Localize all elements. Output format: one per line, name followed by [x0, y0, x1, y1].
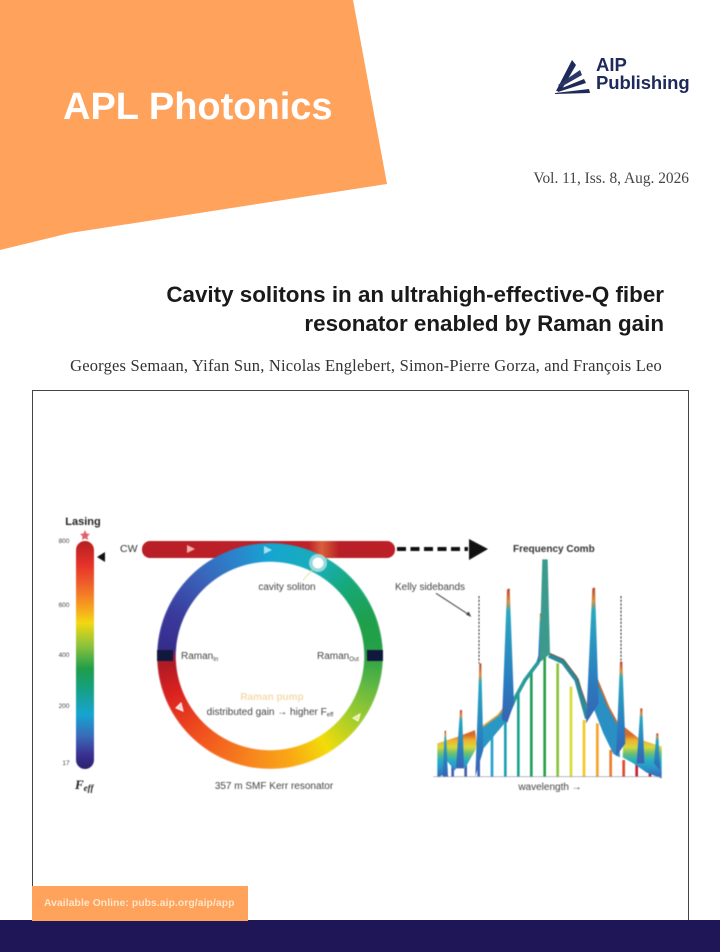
scale labels: 400 [59, 652, 70, 659]
footer band [0, 920, 720, 952]
F eff label: F [75, 777, 84, 792]
scale labels [59, 538, 70, 767]
ring glow [157, 543, 383, 769]
resonator label: 357 m SMF Kerr resonator [215, 781, 334, 792]
wavelength label: wavelength → [517, 782, 582, 793]
frequency comb title: Frequency Comb [513, 544, 595, 555]
Raman out label: Raman [317, 651, 349, 662]
right wing [623, 727, 662, 778]
article title: Cavity solitons in an ultrahigh-effective-Q fiber [166, 282, 664, 307]
lasing label: Lasing [65, 516, 101, 528]
distributed gain label: eff [327, 712, 334, 718]
CW label: CW [120, 543, 138, 555]
volume line: Vol. 11, Iss. 8, Aug. 2026 [533, 170, 689, 187]
comb lines [439, 653, 650, 777]
logo: AIP Publishing [555, 54, 690, 94]
left wing [437, 730, 477, 777]
availability tag: Available Online: pubs.aip.org/aip/app [44, 898, 235, 909]
scale labels: 800 [59, 538, 70, 545]
baseline [433, 776, 662, 778]
orange header shape [0, 0, 387, 250]
logo: AIP Publishing: Publishing [596, 72, 690, 93]
scale labels: 600 [59, 602, 70, 609]
Raman out label: Out [349, 657, 359, 663]
cavity soliton label: cavity soliton [258, 582, 316, 593]
color scale bar [76, 541, 94, 769]
dashed arrow [397, 539, 488, 560]
Kelly sidebands label: Kelly sidebands [395, 582, 465, 593]
centre band [506, 647, 543, 718]
Raman in label: In [213, 657, 218, 663]
central peak [539, 559, 550, 663]
distributed gain label: distributed gain → higher F [207, 707, 327, 718]
comb spectrum [433, 559, 662, 778]
inner left band [480, 698, 513, 753]
icon: scale pointer [97, 552, 105, 562]
ring resonator [157, 543, 383, 769]
arrows on bar and ring [176, 545, 360, 721]
journal title: APL Photonics [63, 86, 333, 128]
scale labels: 200 [59, 703, 70, 710]
spikes [443, 587, 660, 777]
figure [58, 516, 662, 794]
article title [166, 282, 664, 336]
figure frame [32, 390, 689, 927]
Raman in label: Raman [181, 651, 213, 662]
availability tag [32, 886, 248, 921]
inner right band [592, 677, 620, 757]
logo: AIP Publishing: AIP [596, 54, 627, 75]
Raman pump label: Raman pump [240, 692, 304, 703]
article title: resonator enabled by Raman gain [304, 311, 664, 336]
F eff label: eff [84, 783, 95, 793]
scale labels: 17 [62, 760, 70, 767]
authors: Georges Semaan, Yifan Sun, Nicolas Englebert, Simon-Pierre Gorza, and François Leo [70, 356, 662, 375]
waveguide bar [142, 541, 395, 558]
sideband pointer [436, 593, 471, 617]
raman couplers [157, 650, 383, 661]
icon: star [80, 530, 90, 540]
soliton marker [303, 554, 327, 580]
sideband dashed markers [479, 596, 621, 663]
